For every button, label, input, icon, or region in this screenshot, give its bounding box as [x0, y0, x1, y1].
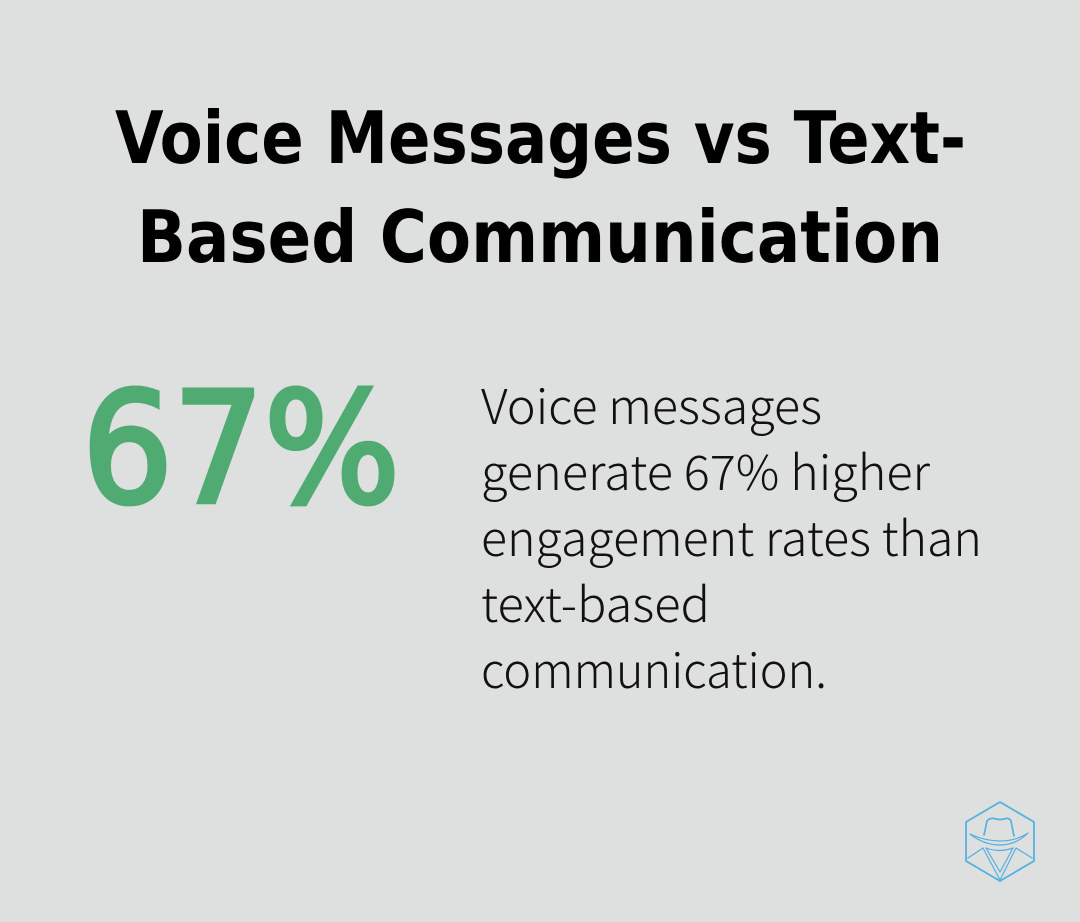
description text	[481, 368, 982, 702]
description text: text-based	[481, 566, 710, 636]
description text: Voice messages	[481, 368, 822, 438]
title: Voice Messages vs Text-	[115, 96, 966, 180]
big stat: 67%: 67%	[82, 360, 400, 539]
description text: generate 67% higher	[481, 434, 931, 504]
title: Based Communication	[137, 195, 943, 279]
icon: hexagon spy logo	[966, 802, 1034, 881]
title	[115, 96, 966, 279]
description text: communication.	[481, 632, 827, 702]
description text: engagement rates than	[481, 500, 982, 570]
